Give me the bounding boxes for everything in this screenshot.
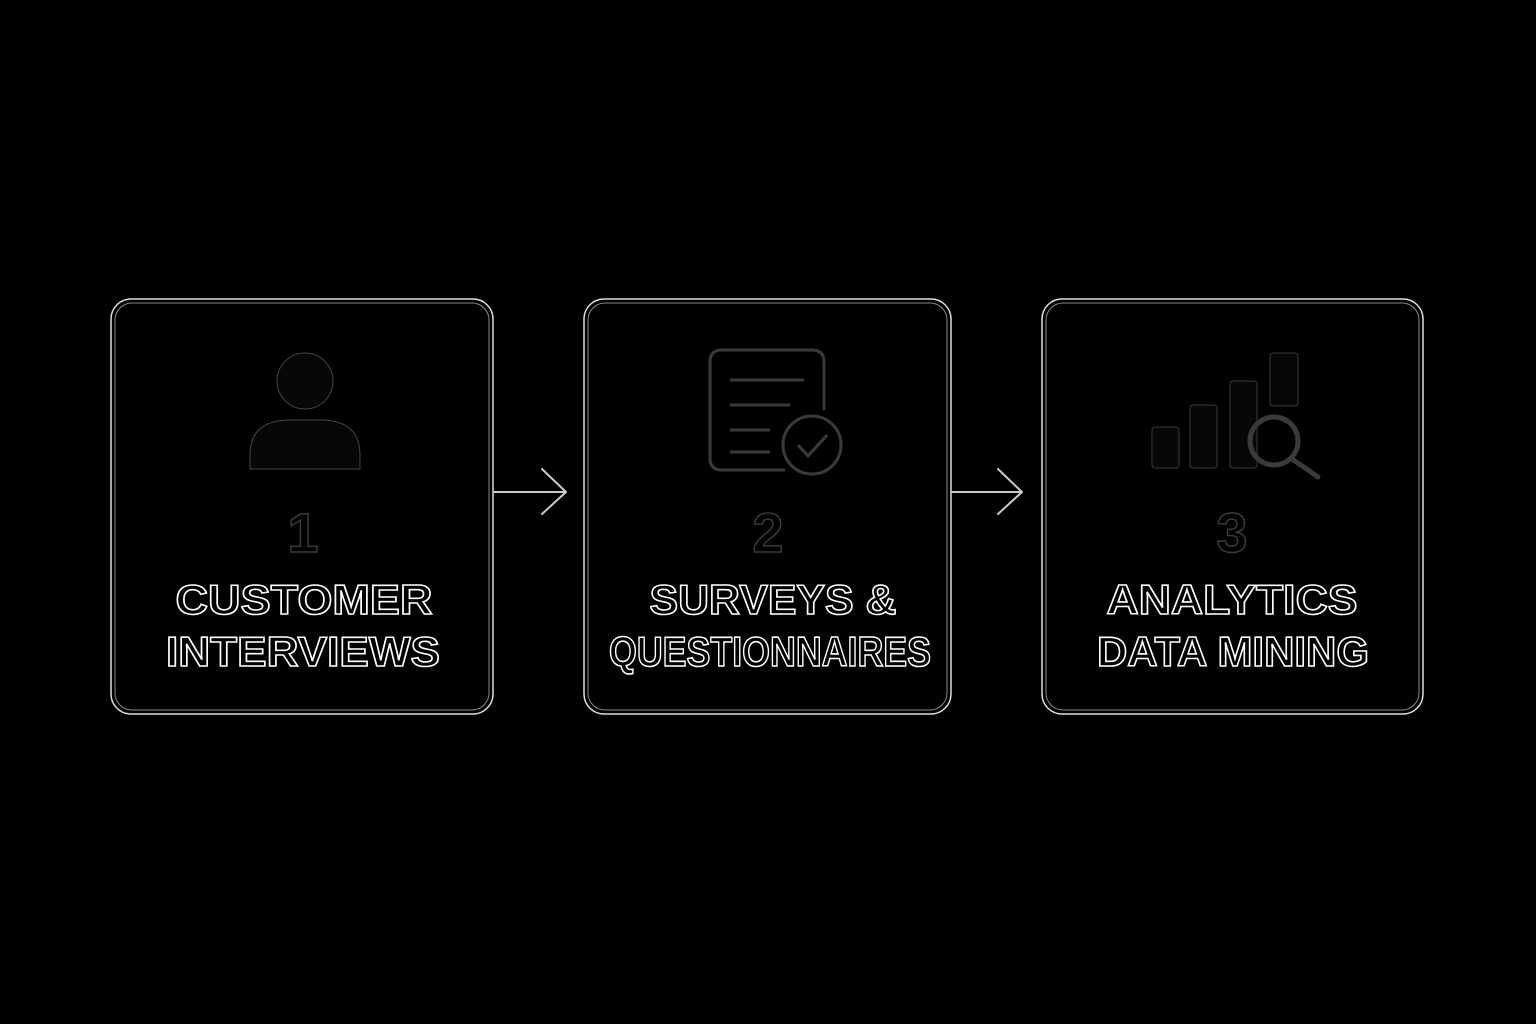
panel: analytics bbox=[1042, 299, 1423, 714]
icon: person bbox=[250, 353, 360, 469]
label: analytics data mining: DATA MINING bbox=[1097, 628, 1369, 675]
icon: bar chart with magnifier bbox=[1152, 353, 1318, 477]
arrow 2 bbox=[952, 469, 1022, 514]
panel: surveys bbox=[584, 299, 951, 714]
number 2: 2 bbox=[752, 501, 784, 564]
label: customer interviews: INTERVIEWS bbox=[166, 628, 440, 675]
label: customer interviews bbox=[166, 576, 440, 675]
label: analytics data mining: ANALYTICS bbox=[1106, 576, 1358, 623]
label: surveys & questionnaires: QUESTIONNAIRES bbox=[609, 628, 931, 675]
label: analytics data mining bbox=[1097, 576, 1369, 675]
icon: document check bbox=[710, 350, 841, 474]
label: customer interviews: CUSTOMER bbox=[176, 576, 432, 623]
panel: customer interviews bbox=[111, 299, 493, 714]
number 1: 1 bbox=[287, 501, 319, 564]
arrow 1 bbox=[494, 469, 566, 514]
number 3: 3 bbox=[1216, 501, 1248, 564]
label: surveys & questionnaires bbox=[609, 576, 931, 675]
label: surveys & questionnaires: SURVEYS & bbox=[650, 576, 896, 623]
